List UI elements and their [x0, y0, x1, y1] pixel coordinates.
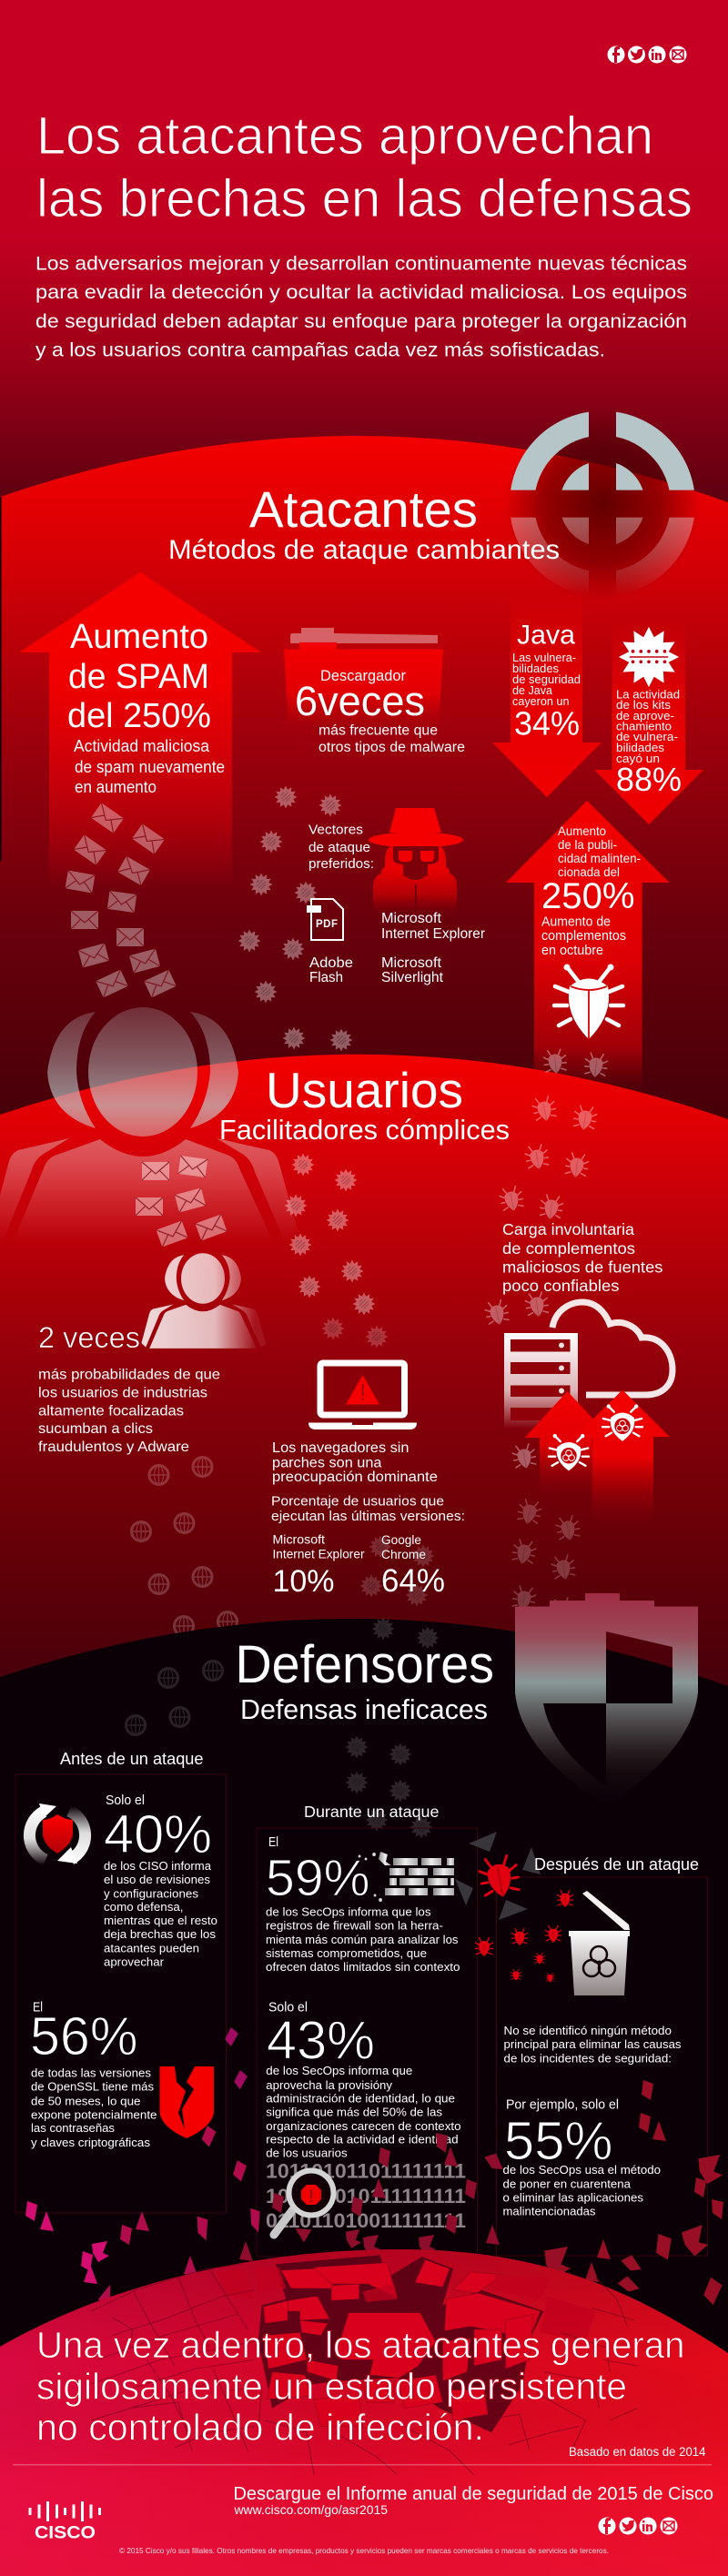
stat: downloader: 6veces	[295, 678, 425, 724]
icon: biohazard trash can	[569, 1891, 630, 1995]
stat: 56%: El	[33, 2000, 43, 2015]
stat: 43%: organizaciones carecen de contexto	[266, 2119, 461, 2133]
icons: faded malware on dark	[346, 1618, 439, 1838]
arrow panel: spam: en aumento	[75, 778, 157, 796]
attack vectors text: preferidos:	[308, 857, 374, 872]
arrow panel: exploit kits: de aprove-	[616, 709, 674, 722]
arrow panel: spam: de spam nuevamente	[75, 758, 225, 776]
stat: browser percentages: 10%	[273, 1564, 335, 1599]
icon: laptop warning	[308, 1363, 417, 1429]
arrow panel: malvertising: de la publi-	[558, 837, 617, 852]
stat: 40%	[104, 1793, 217, 1969]
heading: Defensores: Defensores	[235, 1635, 494, 1694]
arrow panel: exploit kits: La actividad	[616, 688, 680, 701]
stat: 55%: 55%	[504, 2111, 613, 2171]
icon: brick wall	[359, 1852, 454, 1902]
arrow panel: malvertising	[506, 801, 670, 1092]
stat: 56%: de OpenSSL tiene más	[31, 2080, 154, 2093]
stat: 56%: de 50 meses, lo que	[31, 2095, 140, 2107]
flying wall shards	[25, 2026, 723, 2306]
arrow panel: malvertising: Aumento	[558, 823, 606, 838]
download call to action: Descargue el Informe anual de seguridad de 2015 de Cisco	[233, 2484, 713, 2504]
text: unwitting uploads: maliciosos de fuentes	[502, 1258, 663, 1276]
arrow panel: malvertising: 250%	[541, 876, 635, 916]
arrow panel: spam	[19, 572, 261, 887]
attack vectors text: de ataque	[308, 841, 370, 855]
stat: 55%: Por ejemplo, solo el	[506, 2098, 619, 2113]
icons: red bugs	[475, 1854, 573, 1983]
attack vectors text: Adobe	[309, 955, 353, 971]
icon: target reticle	[504, 405, 701, 601]
panel: during an attack	[257, 1803, 477, 2257]
arrow panel: malvertising: complementos	[541, 929, 626, 944]
icon: refresh shield	[29, 1803, 86, 1864]
arrow panel: Java: de seguridad	[512, 672, 581, 686]
arrow panel: exploit kits: 88%	[616, 761, 682, 798]
stat: 40%: de los CISO informa	[104, 1859, 212, 1873]
stat: 59%: de los SecOps informa que los	[266, 1905, 431, 1918]
stat: 55%: de los SecOps usa el método	[502, 2163, 661, 2177]
icon: malware burst	[619, 627, 679, 687]
intro text	[35, 253, 687, 360]
icons: user malware particles	[284, 1154, 388, 1349]
stat: downloader: Descargador	[320, 667, 406, 684]
stat: 55%: de poner en cuarentena	[502, 2177, 632, 2191]
arrow panel: Java: 34%	[514, 704, 580, 742]
stat: 56%: expone potencialmente	[31, 2107, 157, 2122]
arrow panel: spam: de SPAM	[68, 658, 209, 696]
stat: 59%: sistemas comprometidos, que	[266, 1946, 427, 1960]
Cisco logo: CISCO	[35, 2524, 96, 2542]
stat: 55%	[502, 2098, 661, 2218]
text: unwitting uploads: poco confiables	[502, 1277, 620, 1295]
browsers text	[271, 1440, 465, 1524]
arrow panel: Java: de Java	[512, 683, 553, 697]
panel frame	[497, 1877, 708, 2256]
heading: Atacantes: Atacantes	[249, 480, 478, 538]
attack vectors text: Microsoft	[381, 955, 442, 971]
attack vectors text	[308, 823, 485, 985]
arrow panel: exploit kits: chamiento	[616, 719, 672, 733]
stat: 59%: registros de firewall son la herra-	[266, 1918, 443, 1933]
attack vectors text: Microsoft	[381, 911, 442, 926]
stat: 40%: atacantes pueden	[104, 1942, 199, 1955]
stat: 56%: y claves criptográficas	[31, 2136, 150, 2149]
icons: faded globes on dark	[126, 1662, 222, 1734]
download call to action: www.cisco.com/go/asr2015	[233, 2503, 388, 2517]
stat: two times more likely: 2 veces	[38, 1321, 140, 1354]
icon: large user	[0, 1007, 300, 1251]
crater shadow	[258, 2255, 544, 2432]
stat: 56%: las contraseñas	[31, 2121, 115, 2135]
arrow panel: spam: Actividad maliciosa	[74, 737, 210, 755]
title	[36, 106, 693, 228]
arrow panel: spam: del 250%	[67, 697, 211, 735]
stat: browser percentages: Microsoft	[273, 1532, 325, 1547]
stat: no single method	[504, 2024, 682, 2066]
arrow panel: Java: Java	[517, 621, 575, 650]
stat: 59%: 59%	[266, 1849, 369, 1907]
panel heading: Antes de un ataque	[60, 1750, 204, 1768]
social icons bottom	[599, 2517, 677, 2535]
icons: bugs near malvertising arrow	[484, 1049, 608, 1470]
arrow panel: Java	[492, 591, 602, 797]
heading: Usuarios: Facilitadores cómplices	[219, 1114, 510, 1146]
arrow panel: exploit kits: bilidades	[616, 741, 664, 754]
arrow panel: malvertising: cidad malinten-	[558, 851, 641, 865]
stat: two times more likely	[38, 1321, 220, 1455]
attack vectors text: Internet Explorer	[381, 926, 485, 942]
icons: lower bugs	[511, 1499, 581, 1624]
icon: hacker	[369, 808, 463, 915]
binary digits: 101101011011111111	[266, 2160, 466, 2182]
text: unwitting uploads: Carga involuntaria	[502, 1220, 634, 1238]
stat: browser percentages	[273, 1532, 445, 1599]
browsers text: parches son una	[272, 1456, 382, 1470]
arrow panel: spam: Aumento	[70, 618, 208, 656]
arrow panel: exploit kits: de vulnera-	[616, 730, 678, 743]
stat: 43%: aprovecha la provisióny	[266, 2078, 392, 2092]
text: unwitting uploads: de complementos	[502, 1239, 635, 1258]
arrow panel: Java: Las vulnera-	[512, 651, 576, 664]
intro text: de seguridad deben adaptar su enfoque para proteger la organización	[35, 310, 687, 332]
stat: 56%	[30, 2000, 157, 2149]
red cracked wall sphere	[0, 2249, 728, 2576]
panel frame	[257, 1828, 477, 2257]
stat: 40%: deja brechas que los	[104, 1927, 216, 1941]
stat: 56%: 56%	[30, 2006, 138, 2066]
heading: Atacantes: Métodos de ataque cambiantes	[168, 535, 560, 565]
arrow panel: exploit kits: cayó un	[616, 752, 660, 765]
section band: users	[0, 1055, 728, 1729]
source note: Basado en datos de 2014	[569, 2445, 706, 2459]
stat: 40%: 40%	[104, 1804, 212, 1864]
icons: attacker malware particles	[238, 786, 353, 1052]
title: las brechas en las defensas	[36, 169, 693, 228]
arrow panel: exploit kits	[594, 619, 703, 824]
binary digits: 011011010011111111	[266, 2209, 466, 2232]
stat: two times more likely: altamente focalizadas	[38, 1403, 184, 1419]
stat: 43%: administración de identidad, lo que	[266, 2092, 455, 2106]
panel: before an attack	[15, 1750, 226, 2213]
arrow panel: Java: cayeron un	[512, 694, 570, 708]
attack vectors text: Silverlight	[381, 970, 444, 985]
stat: two times more likely: los usuarios de industrias	[38, 1385, 207, 1401]
heading: Defensores	[235, 1635, 494, 1725]
stat: two times more likely: sucumban a clics	[38, 1421, 153, 1437]
text: unwitting uploads	[502, 1220, 663, 1295]
decorative attack triangles	[455, 1832, 541, 1920]
heading: Usuarios	[219, 1062, 510, 1146]
icon: PDF file: PDF	[316, 919, 338, 930]
binary digits	[266, 2160, 466, 2232]
closing statement: no controlado de infección.	[36, 2406, 484, 2448]
stat: 40%: aprovechar	[104, 1955, 165, 1969]
icon: broken castle shield	[515, 1593, 698, 1806]
stat: 43%: 43%	[267, 2011, 375, 2071]
Cisco logo	[29, 2501, 101, 2542]
stat: 56%: de todas las versiones	[31, 2066, 151, 2080]
arrow panel: malvertising: Aumento de	[541, 915, 611, 930]
binary digits: 101101010111111111	[266, 2185, 466, 2207]
icon: biohazard bug left	[549, 1434, 589, 1470]
panel heading: Después de un ataque	[534, 1855, 699, 1874]
stat: 43%	[266, 2000, 461, 2160]
stat: browser percentages: Chrome	[381, 1548, 426, 1561]
stat: 43%: de los SecOps informa que	[266, 2064, 412, 2077]
stat: two times more likely: más probabilidades de que	[38, 1367, 220, 1383]
intro text: para evadir la detección y ocultar la actividad maliciosa. Los equipos	[35, 281, 687, 303]
attack vectors text: Vectores	[308, 823, 363, 837]
stat: 43%: de los usuarios	[266, 2147, 348, 2160]
icons: faded malware under browsers	[360, 1536, 435, 1607]
panel frame	[15, 1774, 226, 2213]
stat: downloader: otros tipos de malware	[318, 740, 465, 755]
stat: downloader	[295, 667, 465, 755]
browsers text: Porcentaje de usuarios que	[271, 1494, 444, 1509]
icon: large bug	[554, 965, 623, 1039]
stat: 43%: Solo el	[268, 2000, 308, 2015]
stat: 55%: malintencionadas	[502, 2204, 596, 2218]
attack vectors text: Flash	[309, 970, 343, 985]
icon: PDF file	[307, 899, 343, 940]
stat: 59%: ofrecen datos limitados sin contexto	[266, 1960, 460, 1974]
stat: browser percentages: Google	[381, 1533, 421, 1547]
closing statement: sigilosamente un estado persistente	[36, 2366, 627, 2408]
stat: browser percentages: Internet Explorer	[273, 1547, 365, 1561]
stat: browser percentages: 64%	[381, 1563, 445, 1599]
arrow panel: exploit kits: de los kits	[616, 698, 671, 712]
browsers text: Los navegadores sin	[272, 1440, 410, 1456]
stat: 59%: El	[268, 1835, 278, 1850]
heading: Atacantes	[168, 480, 560, 565]
arrow panel: malvertising: en octubre	[541, 944, 603, 958]
stat: two times more likely: fraudulentos y Adware	[38, 1440, 189, 1455]
intro text: y a los usuarios contra campañas cada vez más sofisticadas.	[35, 338, 605, 360]
closing statement	[36, 2324, 684, 2448]
icons: user envelopes	[136, 1156, 228, 1248]
title: Los atacantes aprovechan	[36, 106, 653, 166]
stat: 40%: y configuraciones	[104, 1887, 198, 1900]
copyright: © 2015 Cisco y/o sus filiales. Otros nombres de empresas, productos y servicios pueden ser marcas comerciales o marcas de servicios de terceros.	[119, 2546, 609, 2555]
heading: Usuarios: Usuarios	[266, 1062, 463, 1118]
browsers text: ejecutan las últimas versiones:	[271, 1509, 465, 1524]
stat: 40%: mientras que el resto	[104, 1914, 217, 1927]
stat: 40%: como defensa,	[104, 1900, 184, 1914]
stat: 40%: el uso de revisiones	[104, 1873, 210, 1886]
icon: broken shield	[160, 2066, 214, 2138]
stat: 43%: significa que más del 50% de las	[266, 2106, 442, 2119]
stat: downloader: más frecuente que	[318, 722, 438, 739]
panel: after an attack	[475, 1854, 708, 2256]
arrow panel: malvertising: cionada del	[558, 864, 620, 879]
section band: defenders	[0, 1619, 728, 2576]
arrows: uploaded bugs	[524, 1390, 670, 1524]
panel heading: Durante un ataque	[304, 1803, 440, 1821]
stat: no single method: principal para eliminar las causas	[504, 2037, 682, 2051]
section band: attackers	[0, 436, 728, 1183]
stat: no single method: de los incidentes de seguridad:	[504, 2051, 672, 2066]
icon: biohazard bug right	[602, 1404, 642, 1441]
arrow panel: Java: bilidades	[512, 662, 559, 675]
stat: 59%	[266, 1835, 460, 1974]
stat: 43%: respecto de la actividad e identidad	[266, 2133, 459, 2146]
icons: globes	[131, 1458, 237, 1636]
download call to action	[233, 2484, 713, 2517]
icon: server and cloud	[504, 1302, 672, 1429]
stat: no single method: No se identificó ningún método	[504, 2024, 672, 2037]
icon: magnifier	[274, 2171, 333, 2235]
icon: medium user	[141, 1253, 266, 1349]
heading: Defensores: Defensas ineficaces	[240, 1694, 488, 1725]
stat: 55%: o eliminar las aplicaciones	[502, 2191, 643, 2204]
icons: falling spam envelopes	[65, 803, 177, 997]
stat: 59%: mienta más común para analizar los	[266, 1933, 459, 1946]
stat: 40%: Solo el	[106, 1793, 145, 1808]
icon: download folder	[284, 628, 443, 728]
intro text: Los adversarios mejoran y desarrollan continuamente nuevas técnicas	[35, 253, 687, 275]
browsers text: preocupación dominante	[272, 1470, 438, 1485]
social icons top	[608, 45, 686, 64]
closing statement: Una vez adentro, los atacantes generan	[36, 2324, 684, 2366]
